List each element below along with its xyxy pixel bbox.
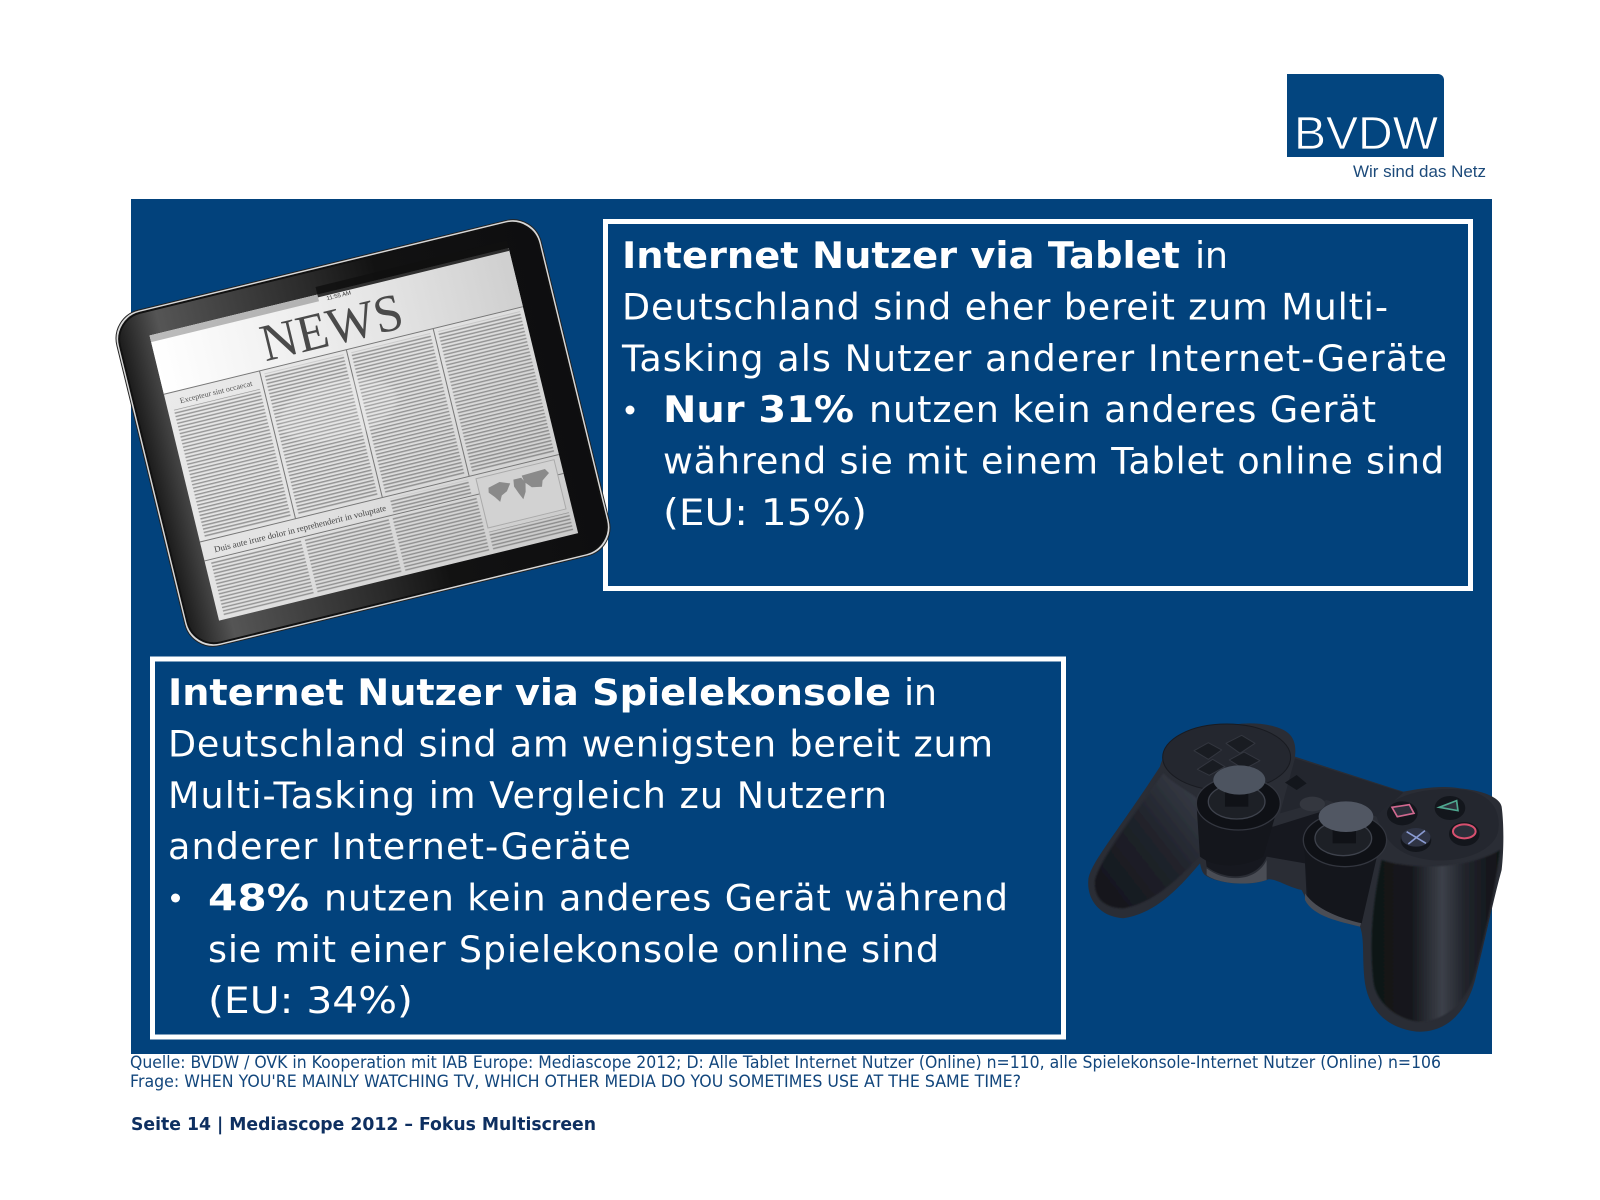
- center body shading: [1200, 810, 1375, 923]
- text box: Spielekonsole: nutzen kein anderes Gerät während: [324, 876, 1008, 920]
- left analog stick: [1196, 765, 1280, 865]
- text box: Tablet: während sie mit einem Tablet online sind: [663, 440, 1444, 482]
- right button dome: [1377, 789, 1499, 860]
- masthead: [150, 248, 523, 394]
- d-pad dome: [1163, 724, 1291, 791]
- right analog stick: [1303, 801, 1387, 923]
- text box: Spielekonsole: sie mit einer Spielekonsole online sind: [208, 928, 939, 971]
- icon: game controller: [1088, 723, 1503, 1032]
- screen glare: [273, 367, 404, 453]
- button: square: [1387, 801, 1418, 825]
- source note: Quelle: BVDW / OVK in Kooperation mit IAB Europe: Mediascope 2012; D: Alle Tablet Internet Nutzer (Online) n=110, alle Spielekonsole-Internet Nutzer (Online) n=106: [130, 1053, 1441, 1072]
- d-pad buttons: [1194, 735, 1260, 775]
- source note: Frage: WHEN YOU'RE MAINLY WATCHING TV, WHICH OTHER MEDIA DO YOU SOMETIMES USE AT THE SAME TIME?: [130, 1072, 1021, 1091]
- text box: Spielekonsole: Deutschland sind am wenigsten bereit zum: [168, 722, 993, 766]
- logo: BVDW: [1287, 74, 1486, 181]
- icon: tablet with news page: [110, 214, 616, 652]
- subheads: Excepteur sint occaecat: [179, 379, 254, 405]
- text box: Tablet: [606, 222, 1470, 588]
- tablet screen: [148, 240, 578, 621]
- logo: BVDW: BVDW: [1294, 107, 1439, 159]
- button: circle: [1449, 822, 1480, 846]
- text box: Tablet: nutzen kein anderes Gerät: [869, 388, 1376, 431]
- text box: Spielekonsole: in: [904, 671, 937, 714]
- tablet screen: 11:55 AM: [326, 291, 352, 302]
- text box: Tablet: Nur 31%: [663, 388, 854, 431]
- newspaper rules: [164, 307, 564, 561]
- tablet screen: Duis aute irure dolor in reprehenderit in voluptate: [213, 503, 387, 554]
- text box: Spielekonsole: Multi-Tasking im Vergleich zu Nutzern: [168, 774, 887, 817]
- button: triangle: [1435, 796, 1465, 820]
- select and ps buttons: [1285, 775, 1325, 811]
- world map box: [476, 460, 566, 528]
- text box: Spielekonsole: anderer Internet-Geräte: [168, 825, 631, 868]
- NEWS headline: NEWS: [254, 281, 409, 373]
- logo: BVDW: Wir sind das Netz: [1353, 162, 1486, 181]
- blue background panel: [131, 199, 1492, 1054]
- newspaper text columns: [171, 311, 573, 615]
- text box: Tablet: Internet Nutzer via Tablet: [622, 234, 1180, 277]
- controller body: [1088, 723, 1503, 1032]
- text box: Tablet: Deutschland sind eher bereit zum Multi-: [622, 286, 1388, 328]
- text box: Tablet: in: [1195, 234, 1228, 277]
- text box: Spielekonsole: (EU: 34%): [208, 979, 413, 1022]
- right grip: [1372, 850, 1500, 1022]
- text box: Tablet: (EU: 15%): [663, 491, 867, 534]
- source note: [130, 1053, 1441, 1091]
- text box: Spielekonsole: [152, 659, 1064, 1037]
- text box: Spielekonsole: 48%: [208, 876, 309, 920]
- footer page line: Seite 14 | Mediascope 2012 – Fokus Multiscreen: [131, 1114, 596, 1135]
- status bar glare: [150, 295, 319, 342]
- left grip: [1095, 773, 1200, 908]
- text box: Tablet: Tasking als Nutzer anderer Internet-Geräte: [621, 337, 1447, 380]
- text box: Spielekonsole: Internet Nutzer via Spielekonsole: [168, 671, 891, 714]
- button: cross: [1401, 828, 1431, 852]
